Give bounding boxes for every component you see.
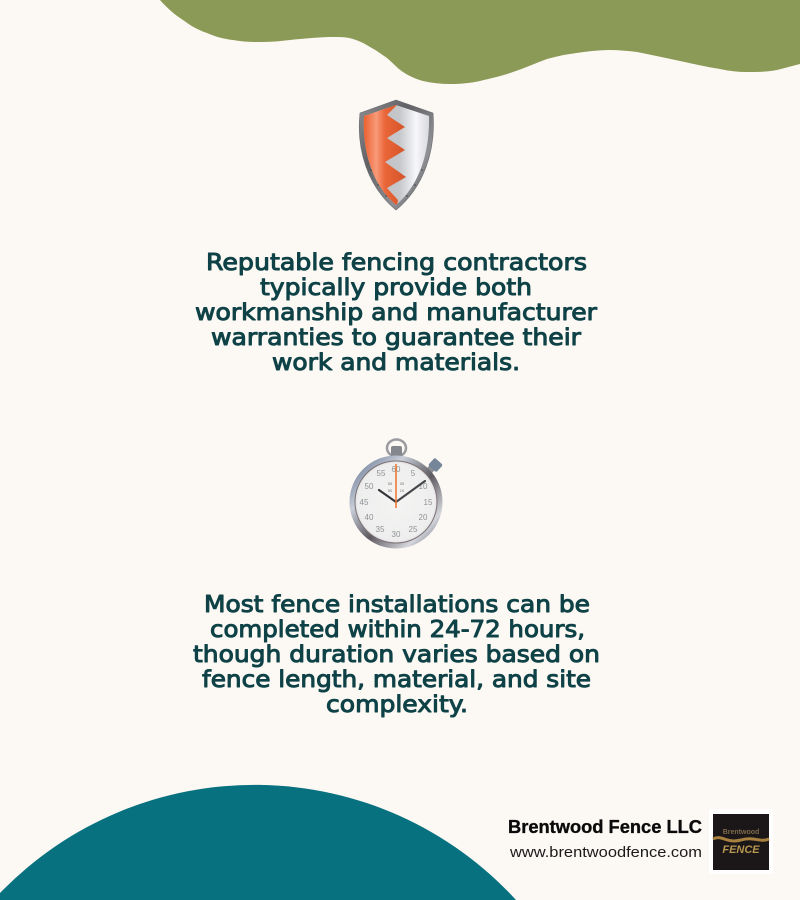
logo: Brentwood: [723, 829, 759, 836]
icon: stopwatch: 35: [376, 525, 385, 534]
icon: stopwatch: 55: [388, 481, 393, 486]
text block: warranties: work and materials.: [272, 348, 520, 376]
text block: warranties: warranties to guarantee their: [211, 323, 581, 351]
icon: stopwatch: 5: [411, 469, 416, 478]
icon: stopwatch: 10: [400, 488, 405, 493]
icon: stopwatch: 30: [392, 530, 401, 539]
icon: stopwatch: 50: [365, 482, 374, 491]
text block: installation time: completed within 24-72 hours,: [210, 615, 585, 643]
icon: shield: [355, 100, 433, 212]
text block: installation time: complexity.: [326, 690, 468, 718]
text block: warranties: typically provide both: [260, 273, 532, 301]
icon: stopwatch: 40: [365, 513, 374, 522]
icon: stopwatch: 05: [400, 481, 405, 486]
bottom teal circle shape: [0, 785, 516, 900]
footer: website: www.brentwoodfence.com: [509, 844, 702, 861]
icon: stopwatch: 20: [419, 513, 428, 522]
text block: installation time: Most fence installations can be: [204, 590, 590, 618]
text block: installation time: fence length, material, and site: [202, 665, 591, 693]
icon: stopwatch: [350, 440, 443, 548]
logo: FENCE: [722, 844, 760, 856]
top green wave shape: [160, 0, 800, 84]
text block: installation time: [193, 590, 600, 718]
footer: company name: Brentwood Fence LLC: [508, 817, 702, 837]
icon: stopwatch: 60: [392, 465, 401, 474]
icon: stopwatch: 15: [424, 498, 433, 507]
icon: stopwatch: 10: [419, 482, 428, 491]
logo: [709, 809, 773, 874]
text block: warranties: workmanship and manufacturer: [195, 298, 597, 326]
icon: stopwatch: 25: [409, 525, 418, 534]
text block: warranties: [195, 248, 597, 376]
text block: installation time: though duration varies based on: [193, 640, 600, 668]
icon: stopwatch: 50: [388, 488, 393, 493]
icon: stopwatch: 55: [377, 469, 386, 478]
text block: warranties: Reputable fencing contractors: [206, 248, 587, 276]
icon: stopwatch: 45: [360, 498, 369, 507]
